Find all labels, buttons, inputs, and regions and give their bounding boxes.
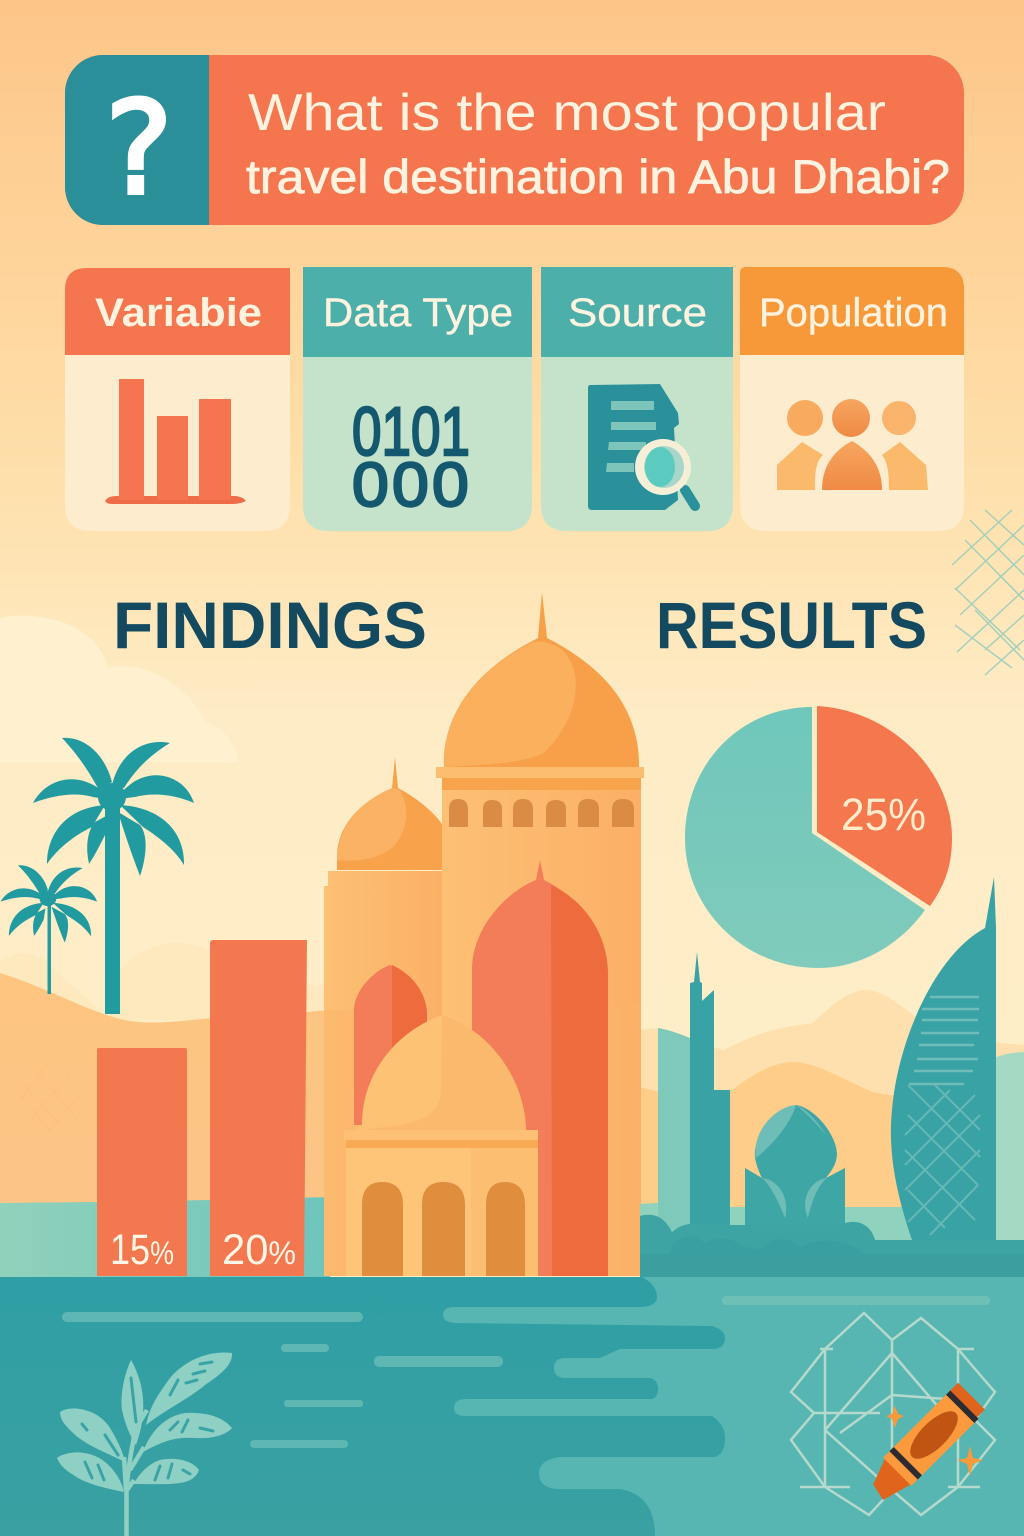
decorative lattice top right [952, 510, 1024, 675]
question banner [65, 55, 964, 225]
faint sand texture [15, 1060, 80, 1135]
icon: crayon [862, 1383, 986, 1507]
icon: people group [777, 399, 928, 490]
main tower [442, 778, 641, 1276]
question line 1: What is the most popular [248, 84, 886, 142]
value: 15%: 15% [110, 1226, 174, 1274]
panel: variable [65, 268, 290, 531]
panel: population [740, 267, 964, 531]
spire tower [690, 952, 730, 1240]
label: data type: Data Type [323, 291, 513, 335]
heading: findings: FINDINGS [113, 588, 427, 662]
light teal shore [640, 1203, 1024, 1277]
left dome [337, 757, 442, 870]
panel: source [541, 267, 733, 531]
right teal hill [996, 1052, 1024, 1245]
label: variable: Variabie [95, 291, 262, 335]
main cornice [436, 767, 644, 778]
label: population: Population [759, 291, 948, 335]
main dome [444, 592, 639, 767]
front building [344, 1130, 538, 1276]
front arches [362, 1182, 525, 1276]
banner coral panel [65, 55, 964, 225]
ground and bushes [640, 1215, 1024, 1277]
palm tree: small [0, 865, 97, 994]
back teal building [658, 1028, 690, 1230]
icon: bar chart [105, 379, 246, 504]
net illustration [791, 1313, 995, 1515]
dark water [0, 1277, 725, 1536]
small coral arch [354, 965, 427, 1125]
sail tower [891, 877, 996, 1240]
label: source: Source [568, 291, 707, 335]
sail tower lattice [905, 1085, 980, 1235]
cloud [0, 616, 238, 762]
bar: 15% [97, 1048, 187, 1276]
heading: results: RESULTS [656, 588, 927, 662]
value: 20%: 20% [222, 1226, 296, 1274]
leaf vein cut-outs [82, 1362, 213, 1480]
mosque illustration [324, 592, 644, 1276]
water ripples [62, 1296, 990, 1448]
pie slice: remainder [685, 707, 925, 968]
icon: sparkles [886, 1406, 983, 1476]
panel: data type [303, 267, 532, 531]
question line 2: travel destination in Abu Dhabi? [246, 150, 950, 203]
tall coral arch [472, 860, 608, 1276]
water [0, 1277, 1024, 1536]
plant illustration [57, 1352, 232, 1536]
pie value: 25% [841, 789, 926, 840]
small mosque [745, 1105, 845, 1225]
icon: binary digits [352, 393, 472, 520]
left tower [324, 871, 442, 1276]
pie slice: 25% [817, 706, 952, 906]
icon: document with magnifier [588, 384, 695, 510]
icon: binary digits: 000 [352, 451, 472, 520]
light water [0, 1277, 1024, 1536]
sand dune [0, 973, 330, 1205]
icon: question mark: ? [105, 75, 173, 224]
sail tower stripes [909, 997, 979, 1084]
background hills [0, 943, 1024, 1207]
banner teal icon tab [65, 55, 209, 225]
tower windows [449, 799, 634, 827]
palm tree: large [33, 738, 194, 1014]
bar: 20% [210, 940, 307, 1276]
front dome [358, 1015, 526, 1130]
icon: binary digits: 0101 [352, 393, 470, 470]
pie chart [685, 706, 952, 968]
shoreline [0, 1197, 330, 1277]
lower tower shade [324, 1004, 641, 1276]
skyline: right teal buildings [640, 877, 1024, 1277]
